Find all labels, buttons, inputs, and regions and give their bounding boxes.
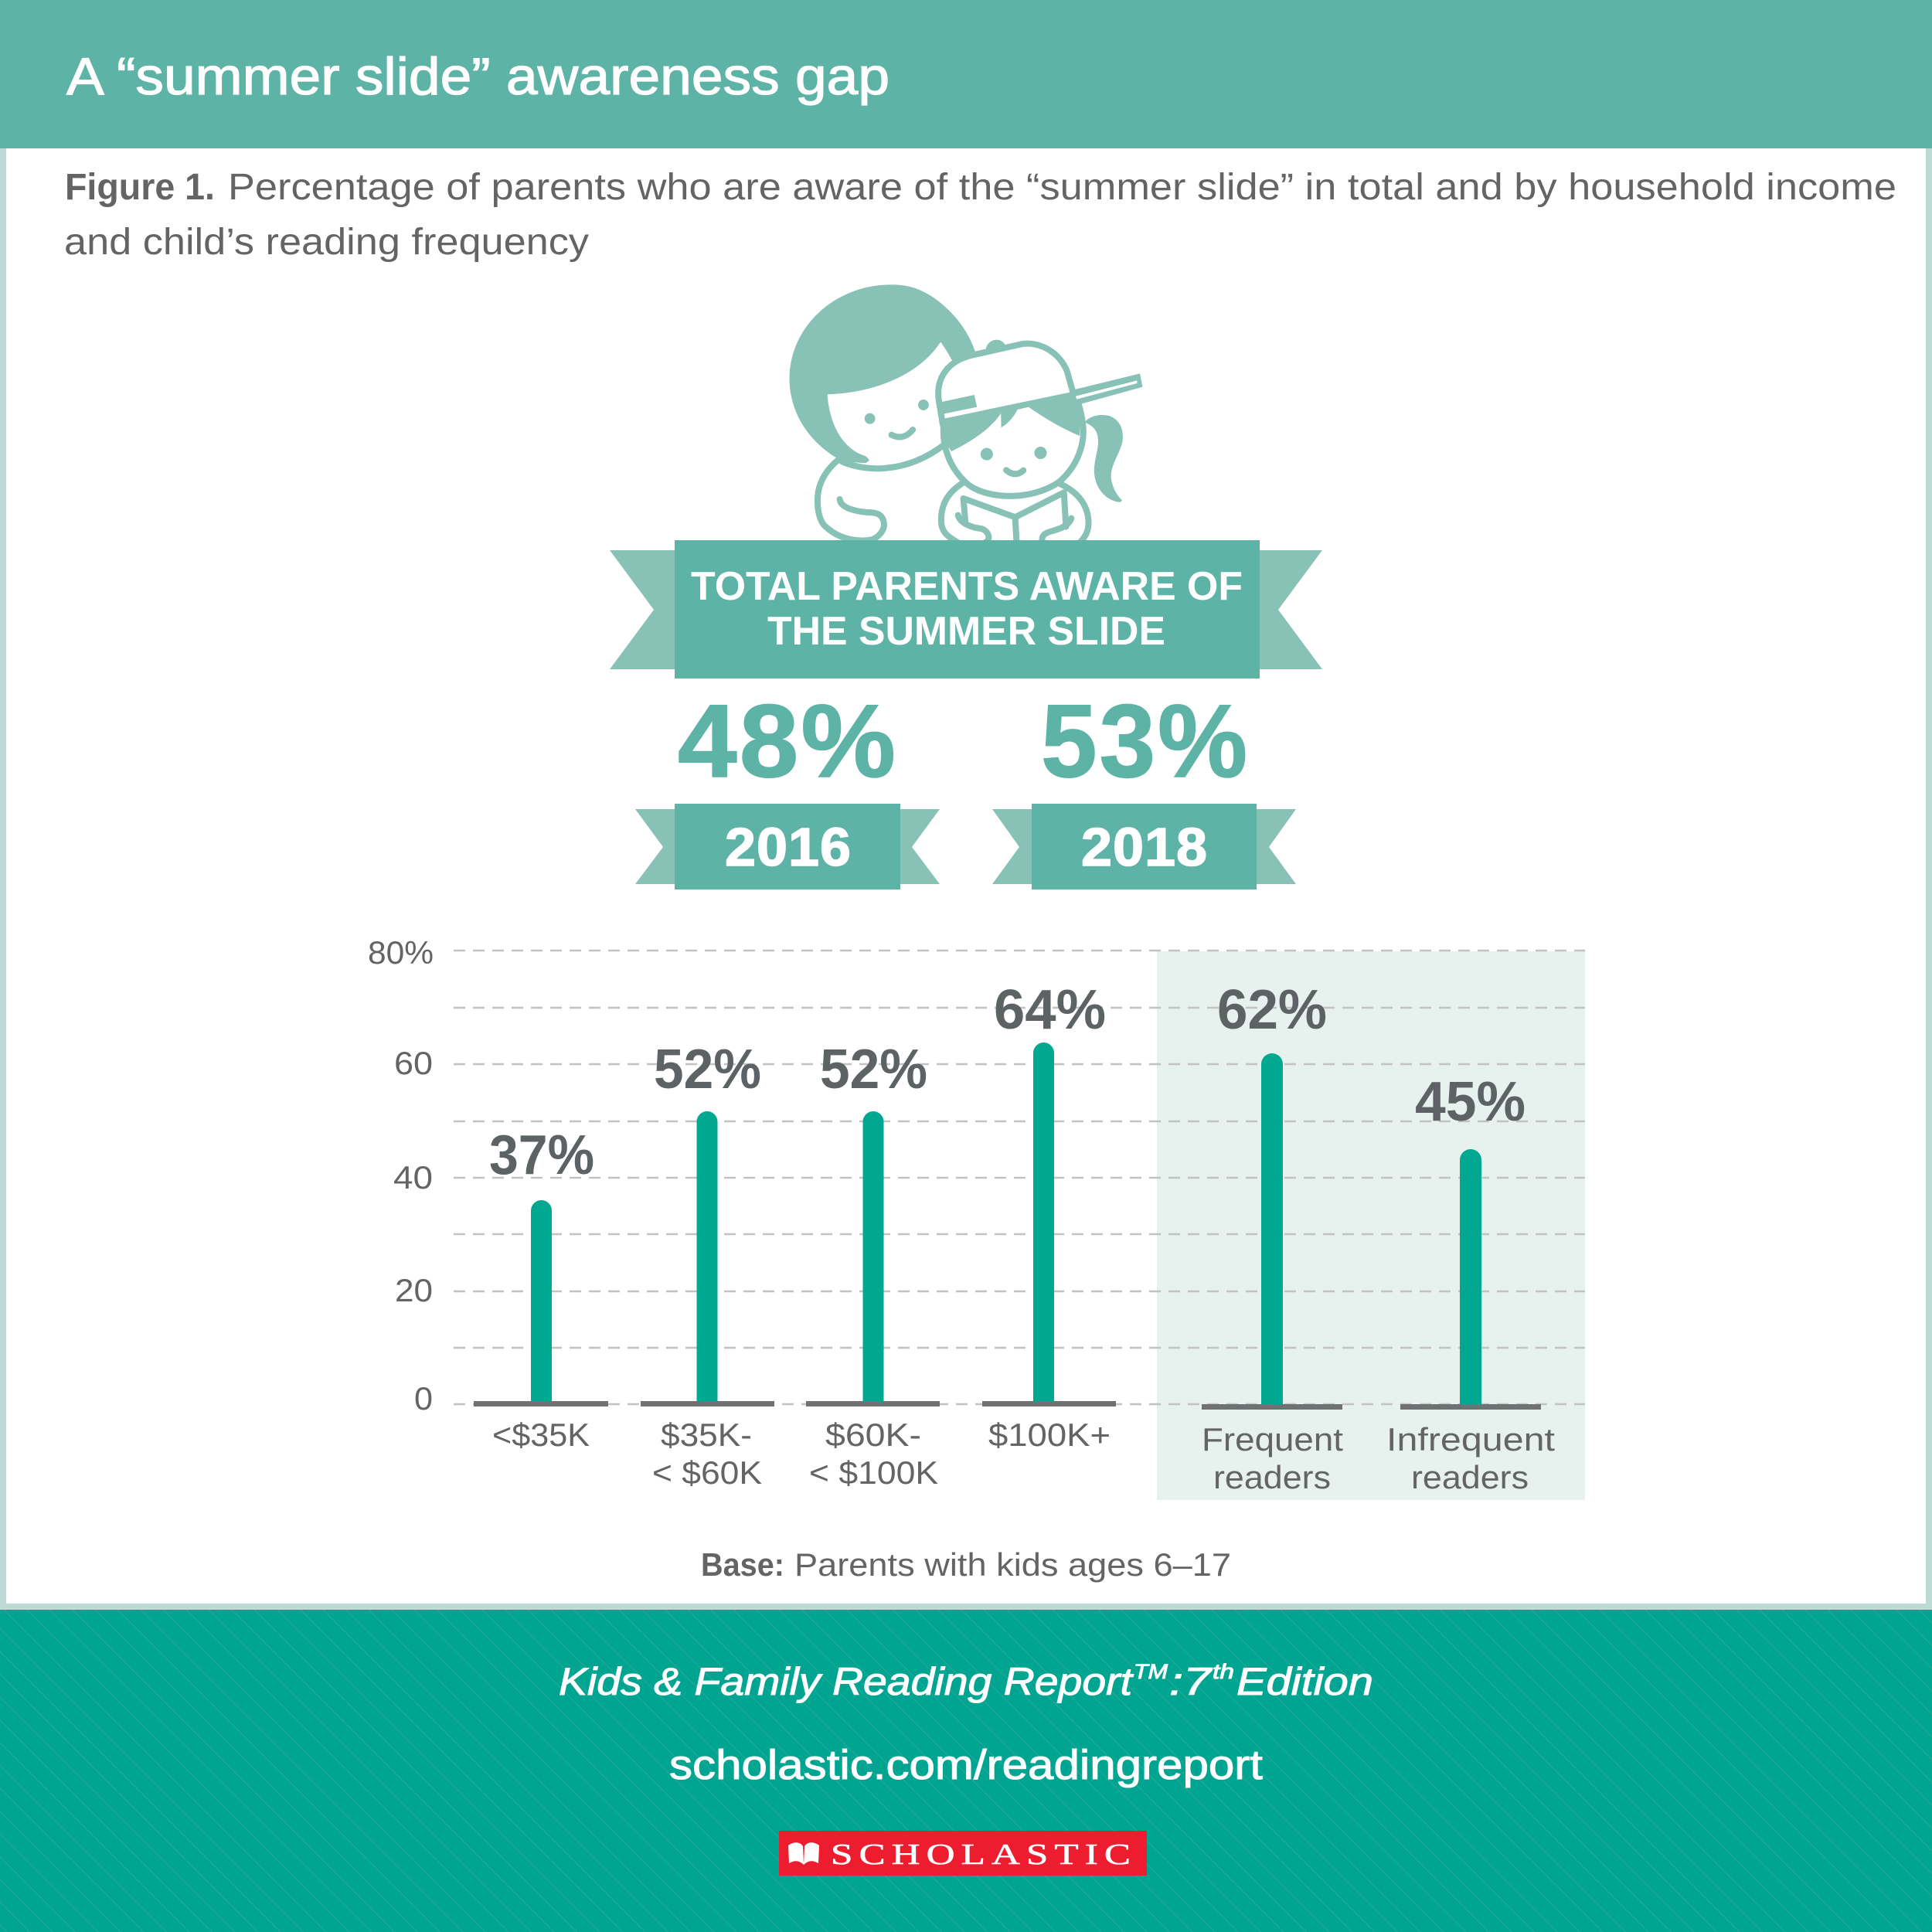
bar: $35K to $60K: < $60K (652, 1454, 762, 1491)
cap brim line (944, 393, 1071, 423)
footer band (0, 1610, 1932, 1932)
figure caption: Figure 1. (65, 167, 215, 208)
ribbon text: THE SUMMER SLIDE (767, 609, 1165, 654)
ribbon tails (610, 550, 1322, 669)
report name: Edition (1236, 1660, 1373, 1703)
y axis labels: 40 (393, 1159, 433, 1196)
bar: frequent readers: Frequent (1202, 1421, 1343, 1458)
figure caption: Percentage of parents who are aware of the “summer slide” in total and by household income (228, 167, 1896, 208)
Scholastic logo: SCHOLASTIC (831, 1838, 1137, 1871)
child topknot (986, 340, 1005, 352)
main ribbon (610, 540, 1322, 679)
report name: Kids & Family Reading Report (559, 1660, 1134, 1703)
y axis labels: 60 (394, 1045, 433, 1081)
report name: :7 (1169, 1660, 1213, 1703)
bar: $35K to $60K: $35K- (661, 1417, 752, 1453)
y axis labels: 80% (368, 934, 434, 971)
child ponytail (1084, 415, 1123, 502)
child hands (958, 515, 1071, 543)
bar: $100K plus: $100K+ (988, 1417, 1111, 1453)
bar: $60K to $100K (806, 1039, 940, 1491)
bar: frequent readers: readers (1213, 1459, 1331, 1495)
bar: $60K to $100K: < $100K (809, 1454, 938, 1491)
illustration: parent and child reading (790, 284, 1143, 543)
Scholastic logo (779, 1831, 1147, 1876)
year ribbon 2018: 2018 (1081, 817, 1208, 877)
year ribbon 2016: 2016 (725, 817, 852, 877)
child face (981, 447, 1047, 474)
year ribbon 2016 (635, 804, 940, 889)
mother face (842, 400, 944, 468)
figure caption: and child’s reading frequency (64, 222, 589, 263)
y axis labels: 20 (395, 1272, 433, 1308)
bar: frequent readers (1202, 979, 1343, 1495)
bar chart (368, 934, 1585, 1500)
cap visor (1071, 373, 1143, 404)
child head and cap outline (938, 344, 1083, 496)
report name: TM (1134, 1660, 1168, 1683)
title: A “summer slide” awareness gap (66, 47, 889, 106)
bar: $35K to $60K (641, 1039, 774, 1491)
reader frequency panel (1157, 951, 1585, 1500)
figure caption (64, 167, 1896, 263)
year ribbon 2018 (992, 804, 1296, 889)
y axis labels (368, 934, 434, 1417)
stat: 53%: 53% (1041, 684, 1250, 799)
child hair (943, 393, 1080, 451)
bar: under $35K: 37% (489, 1124, 594, 1186)
bar: $100K plus (982, 979, 1116, 1453)
ribbon text (691, 564, 1243, 654)
website: scholastic.com/readingreport (669, 1742, 1263, 1788)
book (964, 492, 1066, 543)
ribbon text: TOTAL PARENTS AWARE OF (691, 564, 1243, 609)
base note: Parents with kids ages 6–17 (794, 1546, 1231, 1583)
report name (559, 1660, 1373, 1703)
child body (941, 481, 1088, 543)
bar: $100K plus: 64% (994, 979, 1106, 1041)
bar: $60K to $100K: 52% (820, 1039, 927, 1100)
icon: open book (788, 1842, 819, 1865)
bar: frequent readers: 62% (1217, 979, 1327, 1041)
bar: $35K to $60K: 52% (654, 1039, 761, 1100)
report name: th (1213, 1660, 1234, 1683)
bar: under $35K (474, 1124, 608, 1453)
bar: infrequent readers: readers (1411, 1459, 1529, 1495)
mother body and arm (818, 460, 884, 540)
cap strap (942, 395, 977, 414)
bar: infrequent readers: 45% (1415, 1071, 1526, 1133)
bar: $60K to $100K: $60K- (825, 1417, 921, 1453)
header band (0, 0, 1932, 148)
bar: infrequent readers: Infrequent (1386, 1421, 1555, 1458)
base note: Base: (701, 1546, 784, 1583)
mother hair (790, 284, 975, 463)
bar: under $35K: <$35K (492, 1417, 590, 1453)
stat: 48%: 48% (678, 684, 898, 799)
bar: infrequent readers (1386, 1071, 1555, 1495)
y axis labels: 0 (414, 1380, 433, 1417)
